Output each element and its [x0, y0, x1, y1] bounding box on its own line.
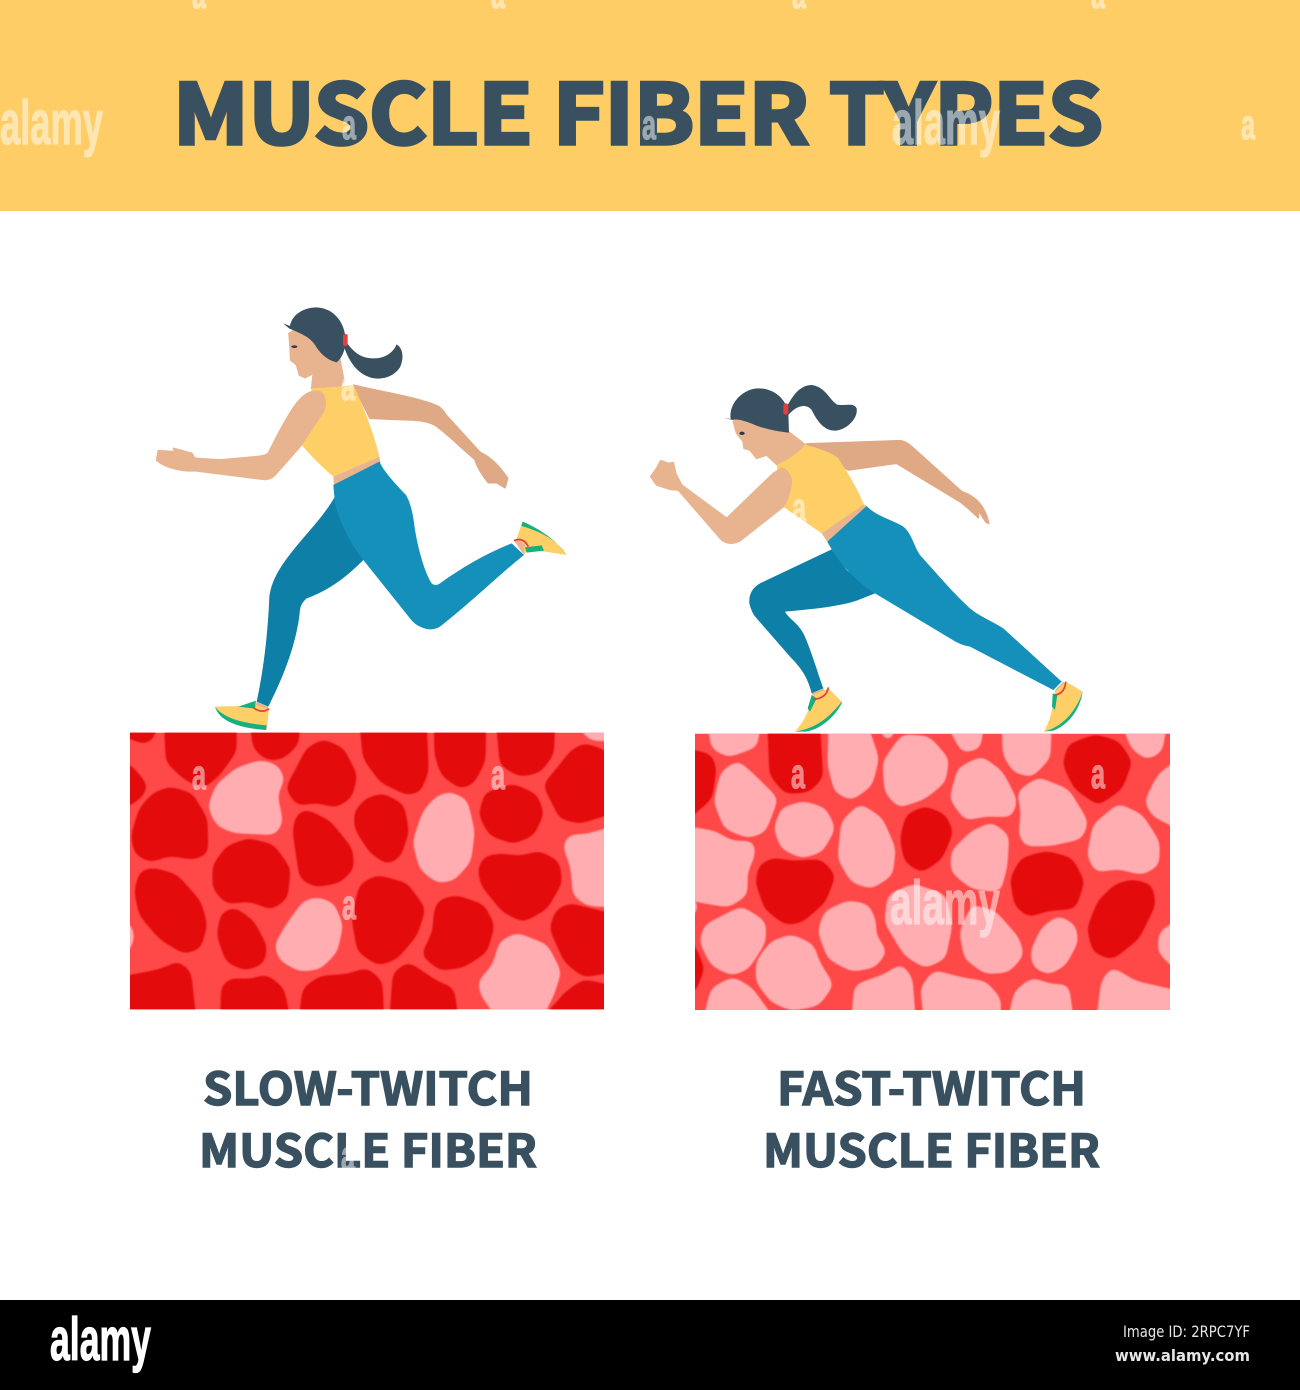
planted shoe — [215, 701, 269, 730]
front arm — [157, 391, 325, 479]
extended-leg shoe — [1044, 682, 1083, 732]
neck and face — [289, 327, 344, 388]
website: www.alamy.com — [1115, 1346, 1250, 1365]
watermarks: alamy — [892, 89, 1000, 158]
header banner — [0, 0, 1300, 211]
watermarks: alamy — [890, 869, 1000, 938]
watermarks: a — [491, 751, 505, 798]
label: fast-twitch: MUSCLE FIBER — [763, 1115, 1100, 1180]
watermarks: a — [791, 750, 805, 797]
watermarks: a — [1241, 101, 1255, 148]
watermarks: a — [192, 751, 206, 798]
image id: Image ID: 2RPC7YF — [1123, 1322, 1250, 1341]
watermarks: a — [792, 484, 806, 531]
watermarks: a — [341, 362, 355, 409]
hair — [723, 388, 789, 433]
watermarks: a — [342, 101, 356, 148]
rear leg — [257, 497, 363, 707]
front leg — [333, 462, 524, 629]
pale fibers — [695, 734, 1170, 1010]
dark red fibers — [695, 734, 1156, 990]
footer bar — [0, 1300, 1300, 1390]
bent-leg shoe — [795, 687, 842, 732]
label: slow-twitch — [199, 1053, 537, 1180]
label: slow-twitch: MUSCLE FIBER — [199, 1115, 537, 1180]
panel: fast-twitch muscle cross-section — [695, 734, 1170, 1010]
runner: slow-twitch figure — [157, 307, 567, 730]
panel: slow-twitch muscle cross-section — [130, 732, 604, 1010]
top — [777, 445, 864, 533]
midriff — [822, 504, 867, 542]
hair tie — [343, 334, 348, 346]
back arm — [807, 441, 989, 523]
watermarks: a — [342, 881, 356, 928]
hair tie — [783, 403, 788, 415]
pale fibers — [130, 732, 604, 1010]
title: MUSCLE FIBER TYPES — [173, 48, 1103, 168]
eye — [291, 345, 297, 348]
runner: fast-twitch figure — [651, 385, 1083, 732]
watermarks: alamy — [0, 89, 103, 158]
dark red fibers — [130, 732, 604, 1010]
watermarks: a — [1091, 750, 1105, 797]
neck and face — [733, 417, 806, 465]
top — [302, 385, 379, 477]
watermarks: a — [642, 101, 656, 148]
label: slow-twitch: SLOW-TWITCH — [203, 1053, 533, 1118]
midriff — [333, 457, 381, 487]
footer logo: alamy — [50, 1306, 151, 1373]
label: fast-twitch: FAST-TWITCH — [777, 1053, 1086, 1118]
ponytail — [787, 385, 857, 431]
front leg — [827, 506, 1062, 690]
panel background — [130, 733, 604, 1009]
rear leg — [749, 549, 875, 693]
front arm — [651, 461, 791, 543]
panel background — [695, 734, 1170, 1010]
raised shoe — [514, 522, 567, 555]
hair — [283, 307, 346, 362]
watermarks: a — [341, 1132, 355, 1179]
label: fast-twitch — [763, 1053, 1100, 1180]
eye — [739, 432, 745, 435]
ponytail — [344, 342, 402, 379]
back arm — [353, 385, 508, 488]
